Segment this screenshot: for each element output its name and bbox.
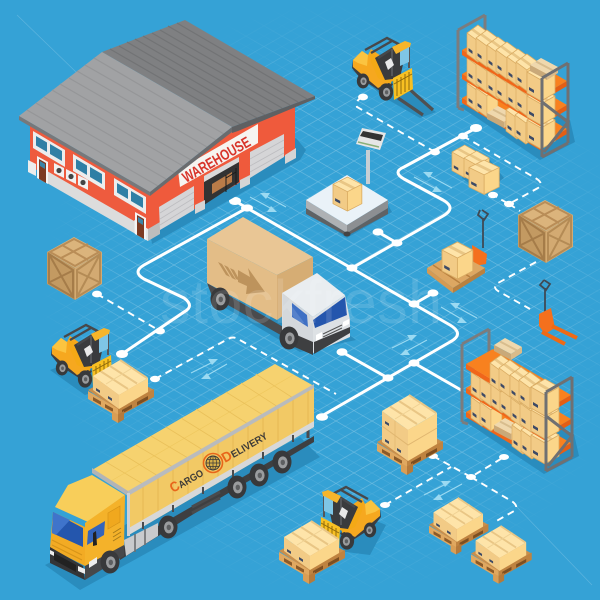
connector nodes	[92, 94, 514, 508]
trailer lettering: DELIVERY	[218, 427, 270, 466]
pallet bottom center	[429, 498, 488, 554]
direction arrows	[191, 172, 477, 500]
globe logo	[204, 454, 222, 472]
windows	[33, 131, 146, 214]
standalone cartons	[452, 145, 504, 194]
air conditioners	[54, 163, 88, 190]
truck cab	[282, 273, 350, 355]
wall pillars	[195, 148, 296, 214]
semi truck	[45, 364, 320, 590]
trailer lettering	[166, 427, 270, 496]
warehouse right wall	[150, 107, 295, 235]
roller doors	[159, 134, 284, 230]
doors	[37, 156, 146, 240]
watermark: stockfresh	[160, 268, 442, 336]
dashed connector network	[97, 97, 541, 523]
trailer	[92, 364, 314, 536]
forklift bottom with pallet	[279, 487, 386, 584]
trailer lettering: CARGO	[166, 464, 206, 496]
forklift top with forks	[352, 38, 436, 118]
shelf rack top right	[458, 15, 575, 160]
shelf rack bottom right	[462, 329, 579, 474]
roof back slope	[102, 20, 315, 133]
pallet bottom right	[471, 526, 532, 584]
pallet jack right	[539, 280, 577, 344]
double-stacked pallet	[377, 395, 443, 475]
box truck	[207, 217, 356, 355]
forklift left with pallet	[50, 325, 154, 423]
loading bay	[204, 157, 239, 205]
crate right	[518, 200, 573, 263]
warehouse left wall	[30, 125, 150, 235]
chassis	[120, 436, 314, 560]
roof front slope	[19, 52, 232, 196]
crate left	[47, 237, 102, 300]
warehouse sign: WAREHOUSE	[180, 134, 254, 186]
pallet with boxes and pallet jack	[427, 210, 488, 293]
fuel tanks	[124, 523, 158, 556]
warehouse building	[19, 20, 315, 244]
solid connector network	[122, 128, 476, 417]
truck cargo box	[207, 217, 313, 320]
cab	[50, 475, 125, 580]
warehouse base strip	[28, 160, 160, 241]
platform scale	[306, 128, 392, 238]
